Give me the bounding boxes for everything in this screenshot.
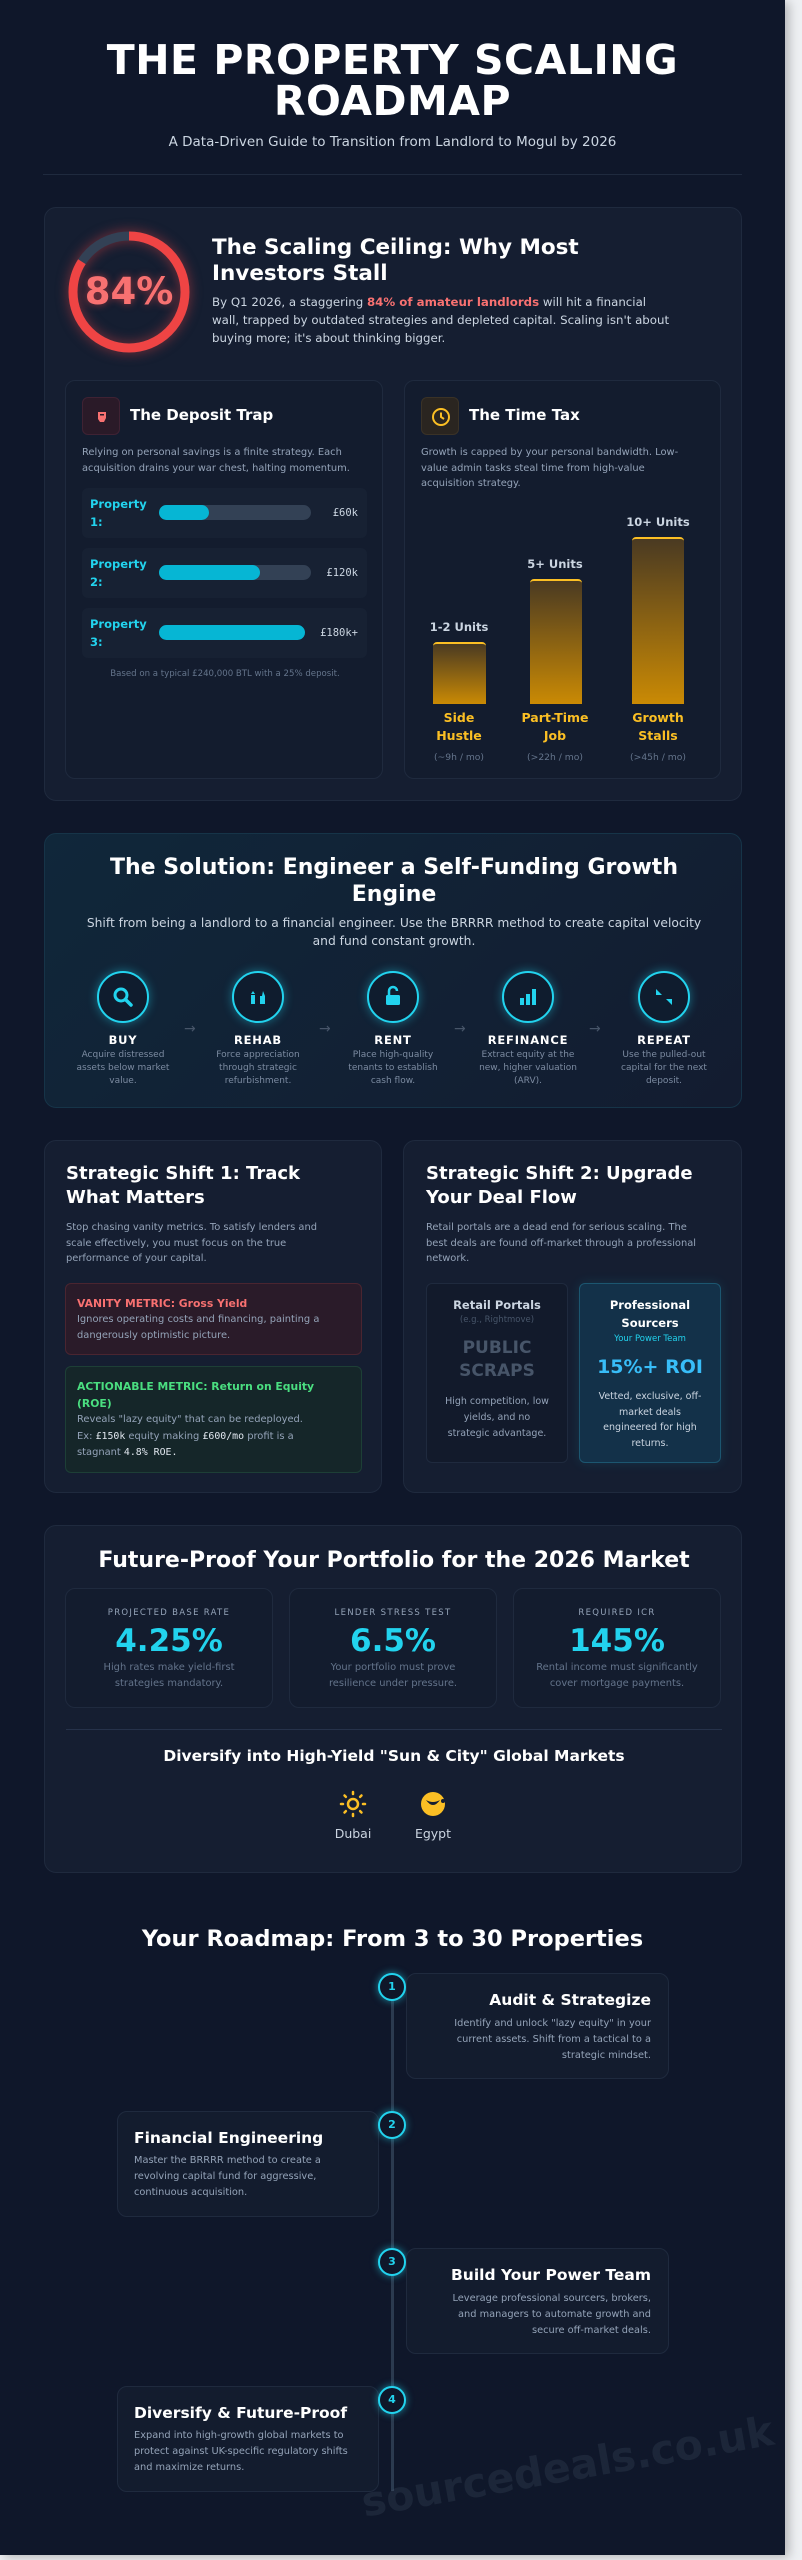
card: professional sourcers: Vetted, exclusive, off- [599,1391,701,1402]
timeline step 3: Build Your Power Team [451,2266,651,2284]
card: retail portals: High competition, low [445,1396,549,1407]
step: buy: value. [109,1076,137,1086]
callout: actionable metric: ACTIONABLE METRIC: Return on Equity [77,1380,314,1393]
callout: vanity metric [65,1283,362,1355]
text: performance of your capital. [66,1253,207,1264]
bar: property 3 [82,608,367,658]
heading: Future-Proof Your Portfolio for the 2026 Market [98,1548,690,1573]
stat: base rate: 4.25% [115,1623,223,1659]
timeline step 3 [373,2243,669,2354]
stat: icr: Rental income must significantly [536,1662,698,1673]
card: professional sourcers: Sourcers [621,1316,679,1330]
text: Growth is capped by your personal bandwidth. Low- [421,447,678,458]
timeline step 4: protect against UK-specific regulatory shifts [134,2446,348,2457]
timeline step 4 [117,2381,411,2492]
stat: stress test: Your portfolio must prove [331,1662,455,1673]
bar chart: Side [444,710,474,725]
step: buy [77,966,170,1086]
card: retail portals: strategic advantage. [448,1428,546,1439]
timeline step 1: strategic mindset. [562,2050,651,2061]
timeline step 2: Financial Engineering [134,2129,323,2147]
card: retail portals [426,1283,568,1463]
card: retail portals: Retail Portals [453,1298,541,1312]
callout: vanity metric: VANITY METRIC: Gross Yield [77,1297,247,1310]
bar: property 1: 1: [90,515,103,529]
callout: actionable metric: Ex: £150k equity making £600/mo profit is a [77,1430,294,1442]
bar chart: (>45h / mo) [630,752,686,763]
timeline step 4: 4 [388,2393,396,2406]
timeline step 4: Diversify & Future-Proof [134,2404,347,2422]
stat: icr: REQUIRED ICR [578,1608,656,1618]
panel: deposit trap [65,380,383,779]
text [426,1222,696,1264]
timeline line [391,1987,394,2491]
timeline step 1 [373,1968,669,2079]
step: repeat [621,966,707,1086]
icon: clock [421,397,459,435]
heading: What Matters [66,1187,205,1208]
heading [110,855,678,907]
bar chart: (~9h / mo) [434,752,484,763]
text: and fund constant growth. [313,934,475,948]
step: rehab [216,966,300,1086]
step: rent: RENT [374,1033,412,1047]
bar chart: 1-2 Units [430,620,488,634]
timeline step 2: Master the BRRRR method to create a [134,2155,321,2166]
step: rent: Place high-quality [353,1050,433,1060]
timeline step 2 [117,2106,411,2217]
timeline step 2: 2 [388,2118,396,2131]
bar: property 3: 3: [90,635,103,649]
card: professional sourcers: Your Power Team [614,1334,686,1344]
timeline step 3: Leverage professional sourcers, brokers, [452,2293,651,2304]
text block [212,295,669,345]
callout: actionable metric [65,1366,362,1473]
stat: base rate: PROJECTED BASE RATE [108,1608,230,1618]
bar chart: 10+ Units [626,515,690,529]
stat: icr: cover mortgage payments. [550,1678,684,1689]
heading: Strategic Shift 1: Track [66,1163,300,1184]
card: professional sourcers: returns. [631,1438,669,1449]
step: refinance: new, higher valuation [479,1063,577,1073]
title: ROADMAP [274,77,511,125]
step: rehab: refurbishment. [225,1076,291,1086]
text: Relying on personal savings is a finite strategy. Each [82,447,342,458]
step: rent [348,966,438,1086]
heading: roadmap: Your Roadmap: From 3 to 30 Properties [142,1926,643,1952]
card: professional sourcers: Professional [610,1298,690,1312]
icon: egypt [415,1792,451,1841]
stat: base rate [65,1588,273,1708]
panel: strategic shift 2 [403,1140,742,1493]
timeline step 1: current assets. Shift from a tactical to a [457,2034,651,2045]
bar chart: Hustle [436,728,482,743]
bar chart: Part-Time [521,710,589,725]
heading: Strategic Shift 2: Upgrade [426,1163,693,1184]
arrow: → [319,1021,331,1037]
text: network. [426,1253,469,1264]
chart: 84% ring: 84% [85,270,173,313]
subtitle: A Data-Driven Guide to Transition from Landlord to Mogul by 2026 [169,134,616,150]
stat: base rate: High rates make yield-first [104,1662,234,1673]
callout: vanity metric: Ignores operating costs and financing, painting a [77,1314,319,1325]
timeline step 4: Expand into high-growth global markets to [134,2430,344,2441]
timeline step 2: continuous acquisition. [134,2187,247,2198]
heading: Your Deal Flow [426,1187,577,1208]
step: repeat: deposit. [646,1076,682,1086]
timeline step 2: revolving capital fund for aggressive, [134,2171,316,2182]
card: professional sourcers: market deals [619,1407,681,1418]
timeline step 3: and managers to automate growth and [458,2309,651,2320]
arrow: → [454,1021,466,1037]
bar chart: Job [544,728,566,743]
bar chart [430,515,690,763]
panel: strategic shift 1 [44,1140,382,1493]
card: professional sourcers: engineered for high [603,1422,697,1433]
heading: The Deposit Trap [130,406,273,424]
step: repeat: REPEAT [637,1033,691,1047]
text: Stop chasing vanity metrics. To satisfy lenders and [66,1222,317,1233]
card: retail portals: SCRAPS [459,1361,535,1381]
arrow: → [184,1021,196,1037]
text block: wall, trapped by outdated strategies and depleted capital. Scaling isn't about [212,313,669,327]
bar chart: Growth [632,710,684,725]
card: retail portals: yields, and no [464,1412,530,1423]
timeline step 3: secure off-market deals. [532,2325,651,2336]
timeline step 3: 3 [388,2255,396,2268]
stat: icr: 145% [569,1623,665,1659]
heading: The Scaling Ceiling: Why Most [212,235,579,260]
stat: icr [513,1588,721,1708]
stat: stress test: resilience under pressure. [329,1678,457,1689]
step: rent: tenants to establish [348,1063,438,1073]
panel: scaling ceiling [44,207,742,801]
card: retail portals: (e.g., Rightmove) [460,1315,534,1325]
icon: fist [82,397,120,435]
callout: actionable metric: stagnant 4.8% ROE. [77,1447,177,1458]
text [421,447,678,489]
bar: property 2: Property [90,557,147,571]
callout: actionable metric: Reveals "lazy equity" that can be redeployed. [77,1414,303,1425]
chart: 84% ring [60,224,198,360]
step: rehab: REHAB [234,1033,282,1047]
step: rehab: Force appreciation [216,1050,300,1060]
bar: property 3: Property [90,617,147,631]
bar: property 1: Property [90,497,147,511]
step: refinance [479,966,577,1086]
heading [66,1163,300,1208]
heading [212,235,579,286]
bar: property 1: £60k [333,507,358,519]
icon: egypt: Egypt [415,1826,451,1841]
card: retail portals: PUBLIC [463,1338,531,1358]
step: buy: BUY [109,1033,137,1047]
bar chart: Stalls [638,728,678,743]
text [82,447,350,474]
bar: property 2: 2: [90,575,103,589]
callout: vanity metric: dangerously optimistic picture. [77,1330,230,1341]
stat: stress test: 6.5% [350,1623,436,1659]
text [87,916,701,948]
stat: stress test: LENDER STRESS TEST [335,1608,451,1618]
bar: property 2 [82,548,367,598]
heading: Engine [352,882,436,907]
timeline step 1: Audit & Strategize [489,1991,651,2009]
bar: property 3: £180k+ [320,627,358,639]
text [66,1222,317,1264]
stat: stress test [289,1588,497,1708]
step: rent: cash flow. [371,1076,415,1086]
panel: future-proof [44,1525,742,1873]
watermark: sourcedeals.co.uk [358,2407,777,2527]
text: acquisition drains your war chest, halting momentum. [82,462,350,474]
step: repeat: Use the pulled-out [622,1050,706,1060]
step: refinance: Extract equity at the [482,1050,574,1060]
text: value admin tasks steal time from high-value [421,462,645,474]
heading: diversify: Diversify into High-Yield "Sun & City" Global Markets [163,1747,625,1765]
timeline step 4: and maximize returns. [134,2462,244,2473]
bar chart: (>22h / mo) [527,752,583,763]
step: refinance: REFINANCE [488,1033,568,1047]
bar: property 2: £120k [326,567,358,579]
heading: The Time Tax [469,406,580,424]
step: repeat: capital for the next [621,1063,707,1073]
text block: buying more; it's about thinking bigger. [212,331,445,345]
text: Shift from being a landlord to a financial engineer. Use the BRRRR method to create capital velocity [87,916,701,930]
step: buy: assets below market [77,1063,169,1073]
bar: property 1 [82,488,367,538]
card: professional sourcers: 15%+ ROI [597,1356,703,1378]
title [106,36,678,125]
icon: dubai sun: Dubai [335,1826,371,1841]
text: acquisition strategy. [421,478,521,489]
bar chart: 5+ Units [527,557,583,571]
step: refinance: (ARV). [514,1076,542,1086]
text: Retail portals are a dead end for serious scaling. The [426,1222,687,1233]
heading: The Solution: Engineer a Self-Funding Growth [110,855,678,880]
timeline step 1: Identify and unlock "lazy equity" in your [454,2018,651,2029]
stat: base rate: strategies mandatory. [115,1678,223,1689]
text: scale effectively, you must focus on the true [66,1238,286,1248]
text: best deals are found off-market through a professional [426,1238,696,1248]
callout: actionable metric: (ROE) [77,1397,112,1410]
timeline step 1: 1 [388,1980,396,1993]
text block: By Q1 2026, a staggering 84% of amateur landlords will hit a financial [212,295,646,309]
card: professional sourcers [579,1283,721,1463]
heading [426,1163,693,1208]
step: buy: Acquire distressed [82,1050,164,1060]
arrow: → [589,1021,601,1037]
title: THE PROPERTY SCALING [107,36,678,84]
panel: time tax [404,380,721,779]
panel: solution [44,833,742,1108]
icon: dubai sun [335,1790,371,1841]
heading: Investors Stall [212,261,388,286]
footnote: Based on a typical £240,000 BTL with a 25% deposit. [110,669,340,679]
step: rehab: through strategic [219,1063,297,1073]
